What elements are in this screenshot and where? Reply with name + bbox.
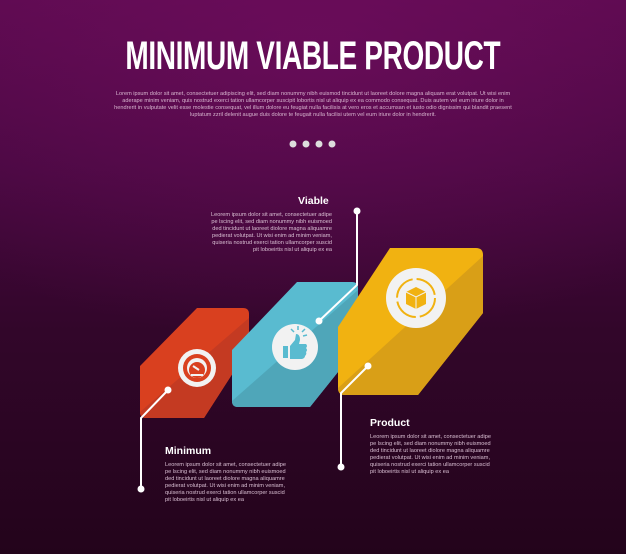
- text: minimum: Leorem ipsum dolor sit amet, consectetuer adipe pe lscing elit, sed diam nonummy nibh euismoed ded tincidunt ut laoreet diolore magna aliquamre pedierat volutpat. Ut wisi enim ad minim veniam, quiseria nostrud exerci tation ullamcorper suscid pit loboeirtis nisl ut aliquip ex ea: [165, 462, 286, 503]
- connector: viable: [316, 208, 360, 324]
- connector: minimum: [138, 386, 172, 492]
- intro text: Lorem ipsum dolor sit amet, consectetuer adipiscing elit, sed diam nonummy nibh euismod tincidunt ut laoreet dolore magna aliquam erat volutpat. Ut wisi enim aderape minim veniam, quis nostrud exerci tation ullamcorper suscipit lobortis nisl ut aliquip ex ea commodo consequat. Duis autem vel eum iriure dolor in hendrerit in vulputate velit esse molestie consequat, vel illum dolore eu feugiat nulla facilisis at vero eros et accumsan et iusto odio dignissim qui blandit praesent luptatum zzril delenit augue duis dolore te feugait nulla facilisi utem vel eum iriure dolor in hendrerit.: [114, 91, 512, 118]
- icon: speedometer: [178, 349, 216, 387]
- heading: minimum: Minimum: [165, 445, 211, 457]
- text: product: Leorem ipsum dolor sit amet, consectetuer adipe pe lscing elit, sed diam nonummy nibh euismoed ded tincidunt ut laoreet diolore magna aliquamre pedierat volutpat. Ut wisi enim ad minim veniam, quiseria nostrud exerci tation ullamcorper suscid pit loboeirtis nisl ut aliquip ex ea: [370, 434, 491, 475]
- icon: thumbs up: [272, 324, 318, 370]
- text: viable: Leorem ipsum dolor sit amet, consectetuer adipe pe lscing elit, sed diam nonummy nibh euismoed ded tincidunt ut laoreet diolore magna aliquamre pedierat volutpat. Ut wisi enim ad minim veniam, quiseria nostrud exerci tation ullamcorper suscid pit loboeirtis nisl ut aliquip ex ea: [211, 212, 332, 253]
- shape: product (yellow): [338, 248, 483, 395]
- shape: viable (blue): [232, 282, 358, 407]
- heading: product: Product: [370, 417, 410, 429]
- dots indicator: [290, 140, 336, 148]
- heading: viable: Viable: [298, 195, 329, 207]
- icon: box with refresh arrows: [386, 268, 446, 328]
- title: MINIMUM VIABLE PRODUCT: [126, 34, 500, 78]
- shape: minimum (red): [140, 308, 249, 418]
- connector: product: [338, 362, 372, 470]
